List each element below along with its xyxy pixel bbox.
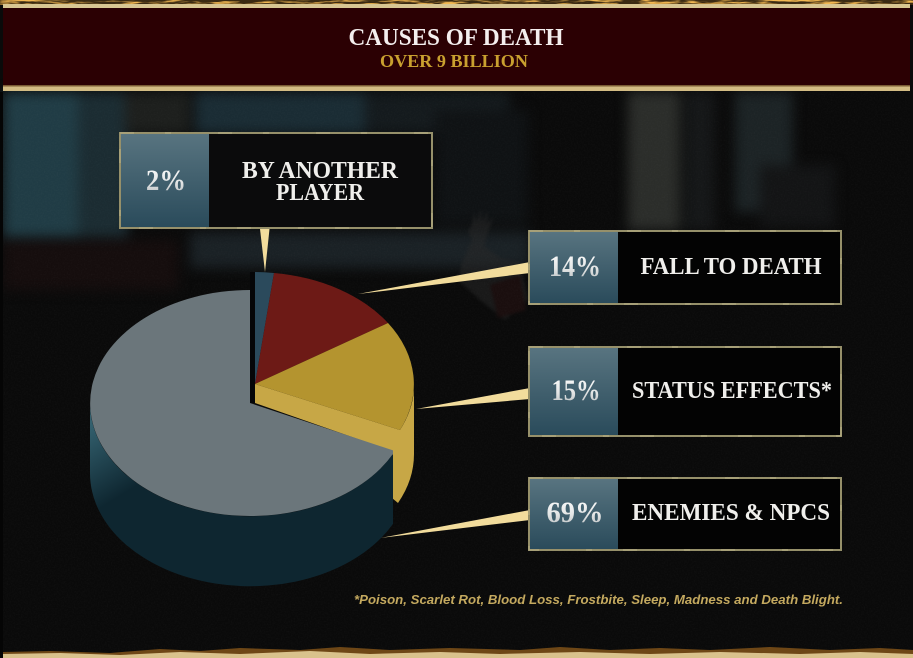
panel: by another player [120, 133, 432, 228]
bottom gold border [0, 647, 913, 658]
label: fall to death: FALL TO DEATH [640, 254, 822, 280]
label: status effects: STATUS EFFECTS* [632, 378, 832, 404]
value: 15%: 15% [552, 374, 600, 407]
3D pie chart [90, 272, 414, 586]
title: CAUSES OF DEATH [348, 25, 564, 51]
top gold border [0, 0, 913, 8]
arrow: 2% pointer [260, 229, 270, 272]
slice: by another player 2% [255, 272, 274, 384]
value: 14%: 14% [549, 250, 601, 283]
label: by another player: BY ANOTHER [242, 158, 399, 184]
label: by another player: PLAYER [276, 180, 365, 206]
label: enemies and npcs: ENEMIES & NPCS [632, 500, 830, 526]
slice: enemies wall [90, 403, 395, 586]
value: 69%: 69% [546, 496, 604, 529]
figure with raised hand [458, 208, 528, 320]
slice: enemies and npcs 69% [90, 290, 395, 516]
header band [3, 8, 910, 91]
label: by another player [242, 158, 399, 206]
gap between slices [250, 272, 255, 403]
slice: status effects 15% [255, 323, 414, 430]
slice: fall to death 14% [255, 273, 388, 384]
slice: status effects wall [255, 384, 414, 503]
arrow: 69% pointer [380, 510, 530, 538]
footnote: *Poison, Scarlet Rot, Blood Loss, Frostbite, Sleep, Madness and Death Blight. [354, 592, 843, 607]
subtitle: OVER 9 BILLION [380, 51, 528, 71]
arrow: 14% pointer [358, 262, 530, 294]
arrow: 15% pointer [416, 388, 530, 409]
value: 2%: 2% [146, 164, 186, 197]
panel: enemies and npcs [529, 478, 841, 550]
panel: fall to death [529, 231, 841, 304]
panel: status effects [529, 347, 841, 436]
